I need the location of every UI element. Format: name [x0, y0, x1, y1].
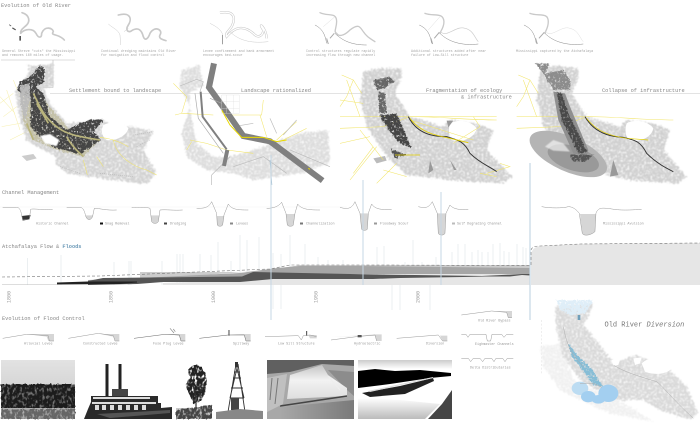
- profile: constructed levee: [68, 333, 119, 341]
- legend: channel management labels: Snag Removal: [105, 222, 129, 226]
- panel: flood control profiles: Delta Distributaries: [470, 366, 511, 370]
- legend: channel management labels: Levees: [236, 222, 248, 226]
- profile: low sill structure: [265, 331, 317, 340]
- profile: snag removal: [67, 207, 117, 220]
- map: collapse of infrastructure: [517, 63, 687, 187]
- caption 5: Additional structures added after near: [411, 49, 486, 53]
- map: settlement bound to landscape: [0, 63, 157, 184]
- map: landscape rationalized: [173, 63, 330, 185]
- heading: Evolution of Old River: Evolution of Old River: [1, 3, 71, 9]
- map title: Landscape rationalized: Landscape rationalized: [241, 88, 311, 94]
- profile: alluvial levee: [3, 334, 54, 341]
- photo: tree: [176, 360, 212, 419]
- profile: floodway scour: [340, 202, 392, 230]
- blue marker lines: [271, 155, 530, 320]
- heading: Atchafalaya Flow & Floods: Atchafalaya Flow & Floods: [2, 244, 81, 250]
- map title: Settlement bound to landscape: Settlement bound to landscape: [69, 88, 161, 94]
- panel: channel management profiles: [0, 202, 642, 235]
- chart: Atchafalaya flow and floods timeline: [2, 235, 700, 310]
- photo: oil derrick: [216, 360, 263, 419]
- sketch 5: additional structures: [419, 13, 478, 44]
- heading: Evolution of Flood Control: Evolution of Flood Control: [2, 316, 85, 322]
- caption 1: General Shreve "cuts" the Mississippi: [2, 49, 75, 53]
- photo: sugar cane field: [1, 360, 75, 419]
- profile: hydroelectric: [331, 334, 382, 341]
- map: Old River Diversion: [540, 300, 698, 422]
- profile: spillway: [199, 330, 251, 341]
- map: fragmentation of ecology and infrastructure: [340, 68, 512, 183]
- map title: Fragmentation of ecology & infrastructure: & infrastructure: [461, 94, 512, 100]
- caption 2: for navigation and flood control: [101, 53, 164, 57]
- caption 3: encourages bed-scour: [203, 53, 243, 57]
- year axis: 1950: [314, 291, 320, 303]
- year axis: 1850: [108, 291, 114, 303]
- profile: Mississippi avulsion: [542, 207, 642, 235]
- long horizontal rule: [50, 92, 700, 94]
- legend: channel management labels: Historic Channel: [36, 222, 69, 226]
- caption 4: Control structures regulate rapidly: [306, 49, 375, 53]
- map title: Old River Diversion: Old River Diversion: [604, 322, 684, 330]
- panel: flood control profiles: Fuse Plug Levee: [153, 342, 184, 346]
- profile: historic channel: [3, 207, 53, 221]
- panel: flood control profiles: Alluvial Levee: [24, 342, 52, 346]
- panel: flood control profiles: Hydroelectric: [354, 342, 380, 346]
- map title: Fragmentation of ecology & infrastructure: Fragmentation of ecology: [426, 88, 502, 94]
- sketch 2: dredging: [108, 14, 166, 45]
- divider rule under first caption: [1, 60, 75, 88]
- panel: flood control profiles: Diversion: [426, 342, 444, 346]
- panel: evolution of Old River sketches: [2, 12, 593, 57]
- panel: flood control profiles: [3, 311, 514, 370]
- caption 1: and removes 160 miles of usage.: [2, 53, 63, 57]
- caption 5: failure of Low-Sill structure: [411, 53, 468, 57]
- caption 2: Continual dredging maintains Old River: [101, 49, 176, 53]
- profile: diversion: [397, 335, 447, 341]
- photo: barge on river: [358, 360, 452, 419]
- photo: aerial of Old River control structure: [267, 360, 354, 419]
- heading: Channel Management: Channel Management: [2, 190, 59, 196]
- year axis: 1800: [6, 291, 12, 303]
- legend: channel management labels: Channelization: [306, 222, 334, 226]
- flood event lines: [28, 235, 526, 310]
- legend: channel management labels: Floodway Scour: [380, 222, 408, 226]
- legend: channel management labels: Dredging: [170, 222, 186, 226]
- profile: levees: [197, 202, 248, 226]
- dashed flow line: [2, 243, 700, 277]
- profile: fuse plug levee: [134, 328, 185, 341]
- year axis: 2000: [416, 291, 422, 303]
- sketch 6: Mississippi captured: [524, 13, 583, 44]
- profile: delta distributaries: [461, 358, 513, 362]
- legend: channel management labels: Self Degrading Channel: [457, 222, 502, 226]
- caption 6: Mississippi captured by the Atchafalaya: [516, 49, 593, 53]
- sketch 4: control structures: [315, 13, 375, 45]
- flow layers: [163, 270, 530, 285]
- photo: steamboat: [80, 360, 172, 419]
- profile: eighmaster channels: [461, 334, 513, 341]
- panel: flood control profiles: Constructed Levee: [83, 342, 118, 346]
- year axis: 1900: [211, 291, 217, 303]
- map title: Collapse of infrastructure: Collapse of infrastructure: [602, 88, 685, 94]
- caption 4: increasing flow through new channel: [306, 53, 375, 57]
- legend: channel management labels: [36, 222, 644, 226]
- year axis: [6, 291, 422, 303]
- panel: flood control profiles: Low Sill Structure: [278, 342, 315, 346]
- profile: Old River bypass: [461, 311, 512, 318]
- panel: flood control profiles: Old River Bypass: [478, 318, 511, 324]
- panel: flood control profiles: Eighmaster Channels: [475, 342, 514, 347]
- legend: channel management labels: Mississippi Avulsion: [603, 222, 644, 226]
- profile: self degrading channel: [418, 202, 468, 235]
- Mississippi capture block: [531, 243, 700, 285]
- sketch 1: Shreve cut: [9, 13, 64, 41]
- caption 3: Levee confinement and bank armorment: [203, 49, 274, 53]
- sketch 3: levee confinement: [210, 12, 268, 45]
- profile: dredging: [132, 207, 183, 223]
- profile: channelization: [267, 202, 320, 226]
- panel: flood control profiles: Spillway: [233, 342, 249, 346]
